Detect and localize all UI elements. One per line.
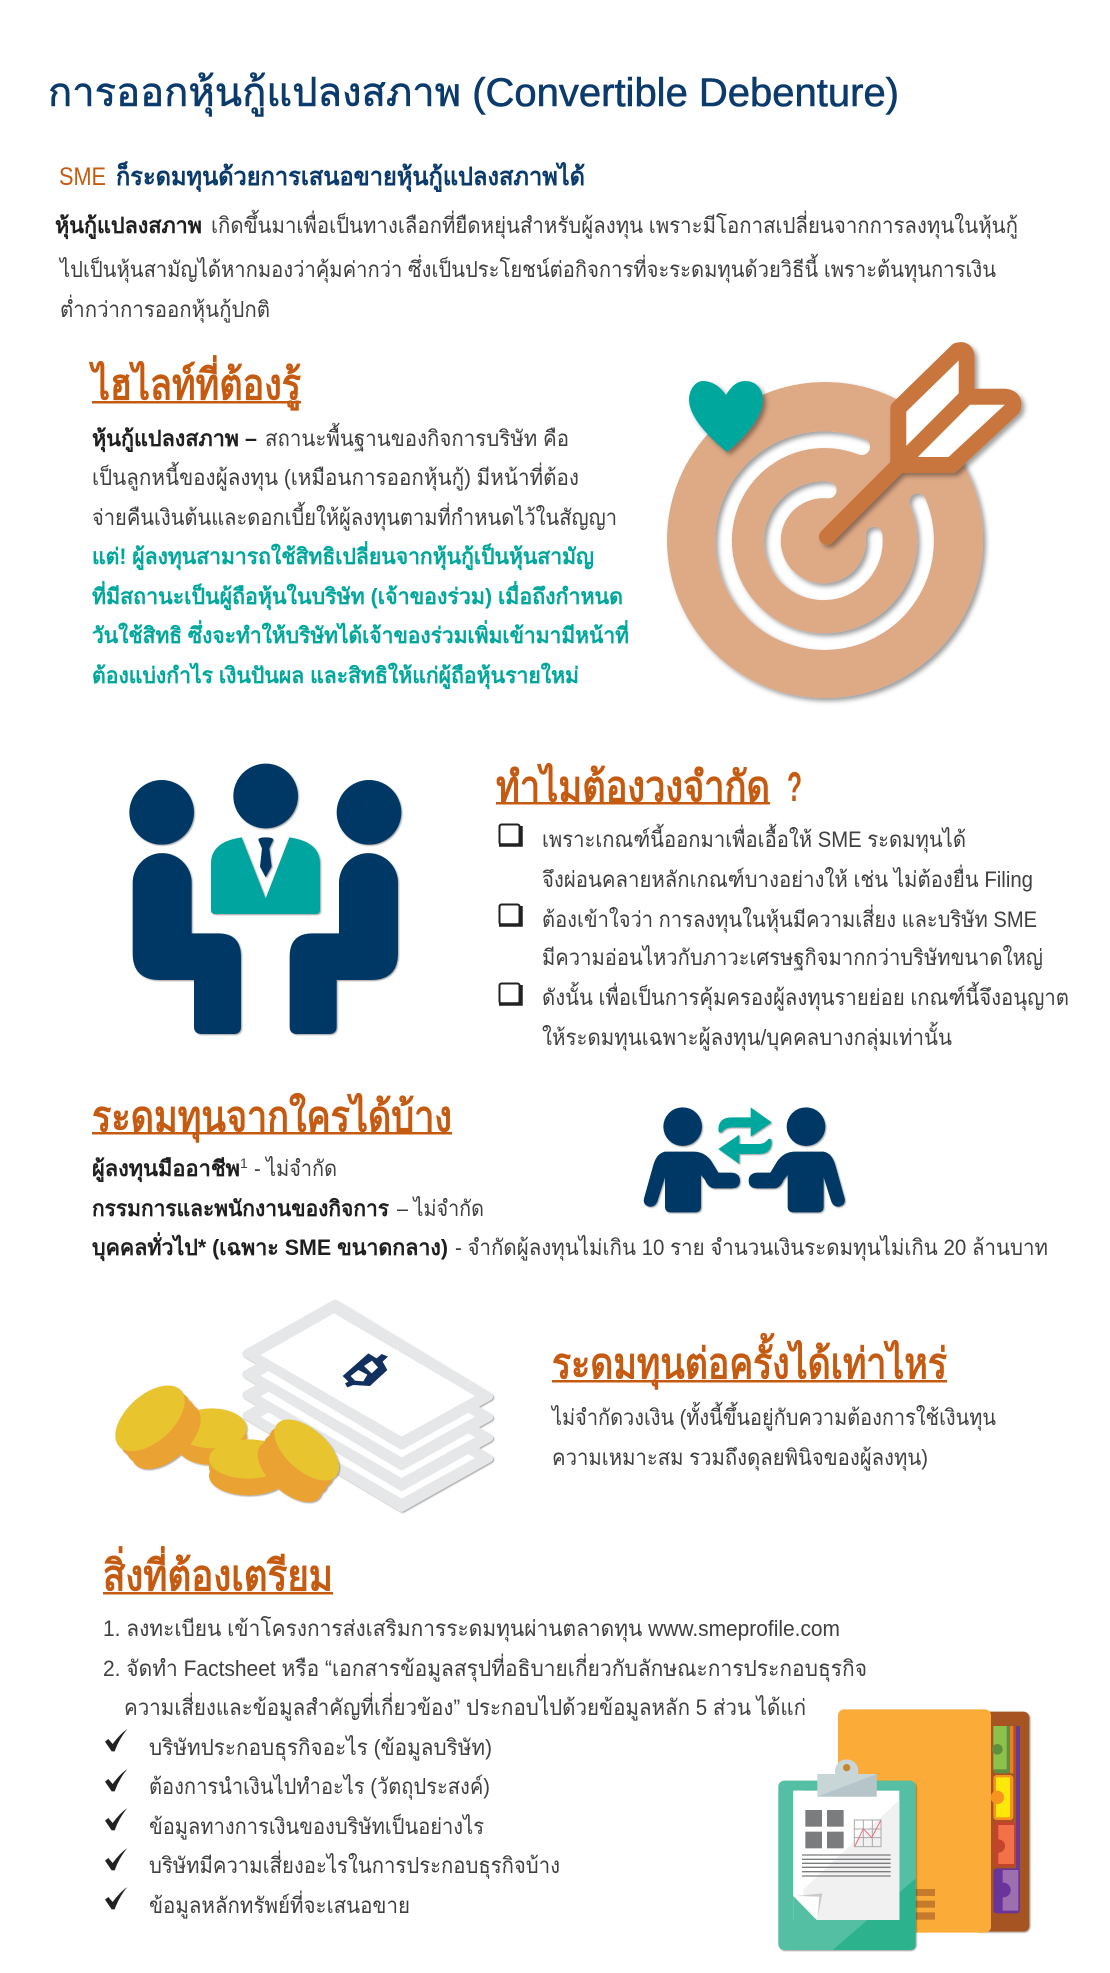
heading: how much per round: ระดมทุนต่อครั้งได้เท่าไหร่ [552,1332,947,1390]
icon: three people meeting [129,764,401,1034]
checkbox 3 [499,984,521,1004]
how much text: ความเหมาะสม รวมถึงดุลยพินิจของผู้ลงทุน) [552,1445,928,1471]
intro paragraph: หุ้นกู้แปลงสภาพ [55,213,202,240]
numbered steps: 2. จัดทำ Factsheet หรือ “เอกสารข้อมูลสรุปที่อธิบายเกี่ยวกับลักษณะการประกอบธุรกิจ [103,1653,867,1682]
heading: what to prepare: สิ่งที่ต้องเตรียม [103,1546,333,1599]
title: การออกหุ้นกู้แปลงสภาพ (Convertible Debenture) [48,71,899,117]
checklist [105,1729,560,1919]
intro paragraph: เกิดขึ้นมาเพื่อเป็นทางเลือกที่ยืดหยุ่นสำหรับผู้ลงทุน เพราะมีโอกาสเปลี่ยนจากการลงทุนในหุ้นกู้ [211,210,1018,239]
highlights text: ต้องแบ่งกำไร เงินปันผล และสิทธิให้แก่ผู้ถือหุ้นรายใหม่ [92,662,579,690]
checkbox 2 [499,904,521,925]
investor list: ผู้ลงทุนมืออาชีพ [92,1156,240,1183]
checklist: ข้อมูลทางการเงินของบริษัทเป็นอย่างไร [149,1812,484,1840]
subheading: ก็ระดมทุนด้วยการเสนอขายหุ้นกู้แปลงสภาพได้ [116,161,585,193]
investor list: - ไม่จำกัด [254,1156,337,1181]
intro paragraph: ไปเป็นหุ้นสามัญได้หากมองว่าคุ้มค่ากว่า ซึ่งเป็นประโยชน์ต่อกิจการที่จะระดมทุนด้วยวิธีนี้ เพราะต้นทุนการเงิน [58,254,996,283]
icon: folder and clipboard [778,1709,1029,1950]
bullet list: why limited: ดังนั้น เพื่อเป็นการคุ้มครองผู้ลงทุนรายย่อย เกณฑ์นี้จึงอนุญาต [542,982,1069,1011]
check 4 [105,1848,127,1870]
numbered steps [103,1616,867,1721]
investor list: 1 [240,1155,248,1171]
coins [103,1373,350,1513]
icon: banknotes and coins [103,1303,489,1513]
intro paragraph [55,210,1018,323]
investor list [92,1155,1048,1262]
banknote stack [246,1303,489,1508]
bullet list: why limited: มีความอ่อนไหวกับภาวะเศรษฐกิจมากกว่าบริษัทขนาดใหญ่ [542,945,1043,971]
heading: highlights: ไฮไลท์ที่ต้องรู้ [89,355,301,411]
bullet list: why limited: ต้องเข้าใจว่า การลงทุนในหุ้นมีความเสี่ยง และบริษัท SME [542,904,1037,933]
bullet list: why limited [499,824,1069,1051]
bullet list: why limited: เพราะเกณฑ์นี้ออกมาเพื่อเอื้อให้ SME ระดมทุนได้ [542,824,966,853]
check 3 [105,1808,127,1830]
investor list: กรรมการและพนักงานของกิจการ [92,1196,389,1221]
investor list: – ไม่จำกัด [397,1196,484,1221]
highlights text [92,423,629,690]
highlights text: สถานะพื้นฐานของกิจการบริษัท คือ [265,423,569,452]
highlights text: แต่! ผู้ลงทุนสามารถใช้สิทธิเปลี่ยนจากหุ้นกู้เป็นหุ้นสามัญ [92,540,594,571]
icon: two people exchanging [644,1107,845,1212]
highlights text: หุ้นกู้แปลงสภาพ – [92,426,257,453]
heading: why limited: ทำไมต้องวงจำกัด [496,762,770,810]
highlights text: วันใช้สิทธิ ซึ่งจะทำให้บริษัทได้เจ้าของร่วมเพิ่มเข้ามามีหน้าที่ [92,619,629,648]
highlights text: จ่ายคืนเงินต้นและดอกเบี้ยให้ผู้ลงทุนตามที่กำหนดไว้ในสัญญา [92,502,617,531]
currency symbol [343,1353,388,1387]
how much text: ไม่จำกัดวงเงิน (ทั้งนี้ขึ้นอยู่กับความต้องการใช้เงินทุน [550,1402,996,1431]
check 1 [105,1729,127,1751]
intro paragraph: ต่ำกว่าการออกหุ้นกู้ปกติ [60,294,270,323]
investor list: บุคคลทั่วไป* (เฉพาะ SME ขนาดกลาง) [92,1231,448,1262]
check 5 [105,1887,127,1909]
checklist: บริษัทมีความเสี่ยงอะไรในการประกอบธุรกิจบ้าง [149,1850,560,1879]
icon: target with arrow [667,350,1013,698]
folder [838,1709,1029,1933]
checklist: ข้อมูลหลักทรัพย์ที่จะเสนอขาย [149,1890,410,1919]
subheading: SME [59,163,106,191]
bullet list: why limited: ให้ระดมทุนเฉพาะผู้ลงทุน/บุคคลบางกลุ่มเท่านั้น [542,1022,952,1051]
checkbox 1 [499,824,521,845]
heading: raise from whom: ระดมทุนจากใครได้บ้าง [92,1092,452,1143]
investor list: - จำกัดผู้ลงทุนไม่เกิน 10 ราย จำนวนเงินระดมทุนไม่เกิน 20 ล้านบาท [455,1235,1048,1261]
how much text [550,1402,996,1471]
bullet list: why limited: จึงผ่อนคลายหลักเกณฑ์บางอย่างให้ เช่น ไม่ต้องยื่น Filing [542,864,1033,892]
checklist: ต้องการนำเงินไปทำอะไร (วัตถุประสงค์) [149,1774,490,1800]
check 2 [105,1769,127,1791]
clipboard [778,1759,916,1950]
checklist: บริษัทประกอบธุรกิจอะไร (ข้อมูลบริษัท) [149,1735,492,1761]
heading: why limited: ? [787,763,802,810]
numbered steps: ความเสี่ยงและข้อมูลสำคัญที่เกี่ยวข้อง” ประกอบไปด้วยข้อมูลหลัก 5 ส่วน ได้แก่ [124,1692,806,1721]
highlights text: ที่มีสถานะเป็นผู้ถือหุ้นในบริษัท (เจ้าของร่วม) เมื่อถึงกำหนด [92,580,623,611]
numbered steps: 1. ลงทะเบียน เข้าโครงการส่งเสริมการระดมทุนผ่านตลาดทุน www.smeprofile.com [103,1616,840,1642]
highlights text: เป็นลูกหนี้ของผู้ลงทุน (เหมือนการออกหุ้นกู้) มีหน้าที่ต้อง [92,462,579,491]
